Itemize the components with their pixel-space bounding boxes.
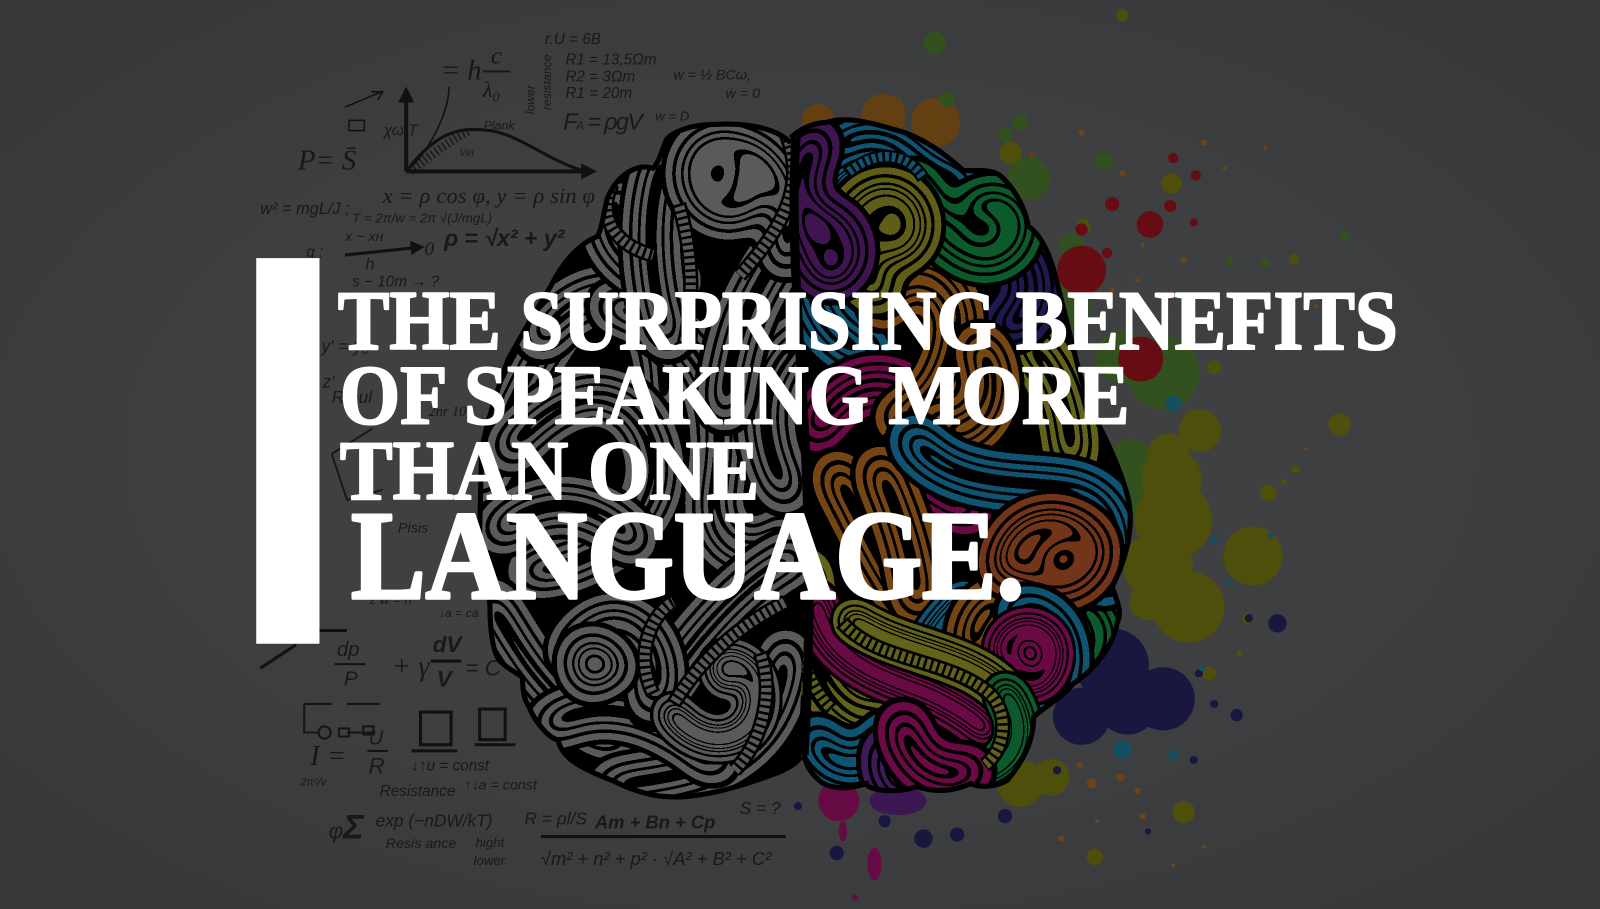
formula: polar coordinates: x = ρ cos φ, y = ρ sin φ	[382, 183, 595, 208]
chart labels: χω T	[382, 123, 419, 140]
right hemisphere ladder bands	[796, 157, 1003, 765]
formula: sum: φΣ	[329, 809, 365, 847]
splatter: navy blob	[794, 614, 1287, 860]
black arrow	[260, 630, 347, 668]
formula: force: FA = ρgV	[563, 109, 645, 135]
title line 4: LANGUAGE.	[351, 486, 1024, 626]
formula: resistor values: R1 = 20m	[565, 85, 632, 102]
formula: dp over p: dp	[337, 639, 360, 661]
diagram: hexagon	[332, 428, 383, 500]
formula: displacement with arrow: 0	[425, 239, 435, 260]
splatter: purple bottom	[869, 787, 927, 815]
formulas left of title: z w = h	[368, 592, 412, 607]
formula: ohm's law: U	[368, 728, 383, 750]
title	[338, 275, 1398, 626]
brain outline	[480, 120, 1130, 797]
formula: fraction c over lambda: λ₀	[482, 77, 500, 102]
splatter: magenta drops	[818, 780, 882, 901]
accent bar	[256, 258, 319, 644]
formula: dp over p	[335, 632, 502, 692]
formula: dp over p: dV	[433, 632, 463, 657]
formula: resistor values: r.U = 6B	[545, 31, 601, 48]
formula: h: h	[365, 255, 374, 273]
formula: dp over p: = C	[465, 655, 502, 680]
formula: period: T = 2π/w = 2π √(J/mgL)	[352, 210, 492, 225]
chart: planck curve	[345, 87, 596, 179]
right hemisphere flowing bands	[801, 135, 1116, 787]
formula: ohm's law: R	[368, 753, 385, 778]
formula: s: s − 10m → ?	[352, 274, 440, 291]
splatter: fine teal and orange flecks	[1058, 130, 1318, 867]
formulas left of title: 2nr 10	[429, 404, 466, 420]
note: resistance: resistance	[540, 54, 554, 110]
left hemisphere ladder bands	[606, 133, 794, 770]
formula: displacement with arrow	[344, 229, 435, 260]
formula: omega zero: ẇ = 0	[726, 86, 760, 102]
note: lower resistance: lower	[524, 84, 538, 114]
formula: S unknown: S = ?	[740, 798, 781, 818]
diagram: force boxes	[411, 709, 515, 751]
formula: w squared: w² = mgL/J ;	[260, 200, 350, 218]
text: hight lower	[474, 835, 506, 868]
formula: plane distance fraction: Am + Bn + Cp	[594, 811, 715, 832]
splatter: olive blobs	[997, 9, 1351, 865]
formula: P over S: P= S̄	[297, 145, 356, 176]
formulas left of title: Pisis	[398, 521, 428, 537]
formula: photon energy: = h	[441, 56, 482, 87]
formula: w = D: w = D	[655, 108, 690, 123]
formulas left of title: Rmul	[332, 387, 373, 407]
brain: right hemisphere coloured	[790, 122, 1128, 788]
formula: resistor values: R1 = 13,5Ωm	[565, 51, 657, 68]
formulas left of title: ↓a = ca	[439, 606, 479, 620]
formula: displacement with arrow: x − xн	[344, 229, 384, 245]
title line 1: THE SURPRISING BENEFITS	[338, 275, 1398, 368]
text: resistance: Resistance	[380, 783, 455, 800]
formula: fraction c over lambda: c	[491, 42, 502, 69]
formula: const: ↓↑υ = const	[411, 757, 490, 774]
math formulas	[260, 31, 786, 869]
formula: omega: w = ½ BCω,	[673, 68, 751, 84]
splatter: red blobs	[1057, 153, 1201, 382]
formulas left of title: y' = y₀	[321, 336, 369, 356]
formula: dp over p: V	[437, 667, 454, 692]
brain: left hemisphere monochrome	[482, 126, 804, 794]
title line 2: OF SPEAKING MORE	[340, 349, 1130, 442]
splatter: orange top blobs	[802, 94, 1036, 158]
left hemisphere flowing bands	[480, 142, 806, 786]
formula: plane distance fraction	[541, 811, 786, 869]
formula: fraction c over lambda	[482, 42, 510, 102]
text: hight lower: lower	[474, 853, 506, 868]
formula: dp over p: P	[344, 669, 358, 691]
formula: resistor values: R2 = 3Ωm	[565, 69, 635, 86]
formula: plane distance fraction: √m² + n² + p² · √A² + B² + C²	[541, 848, 772, 869]
diagram: circuit	[304, 704, 380, 739]
text: hight lower: hight	[476, 835, 506, 850]
formula: 2pi: 2π²/v	[299, 777, 328, 789]
splatter: green blobs	[923, 32, 1350, 518]
title line 3: THAN ONE	[340, 425, 759, 518]
formula: ohm's law	[309, 728, 388, 778]
formula: g: g :	[306, 244, 323, 261]
infographic canvas	[256, 9, 1396, 901]
formulas left of title	[321, 336, 479, 620]
formula: a const: ↑↓a = const	[464, 778, 538, 794]
formula: resistance law: R = ρl/S	[525, 808, 587, 828]
formula: exponent: exp (−nDW/kT)	[376, 810, 493, 830]
chart labels: Plank	[484, 119, 515, 133]
text: resistance lower: Resis ance	[386, 836, 456, 852]
formula: dp over p: + γ	[392, 651, 430, 682]
paint splatter	[794, 9, 1351, 901]
formula: rho: ρ = √x² + y²	[443, 225, 566, 251]
chart labels	[382, 119, 515, 159]
formula: ohm's law: I =	[309, 741, 346, 772]
formula: resistor values	[545, 31, 657, 102]
chart labels: Vin	[459, 148, 474, 159]
formulas left of title: z'	[322, 372, 335, 392]
